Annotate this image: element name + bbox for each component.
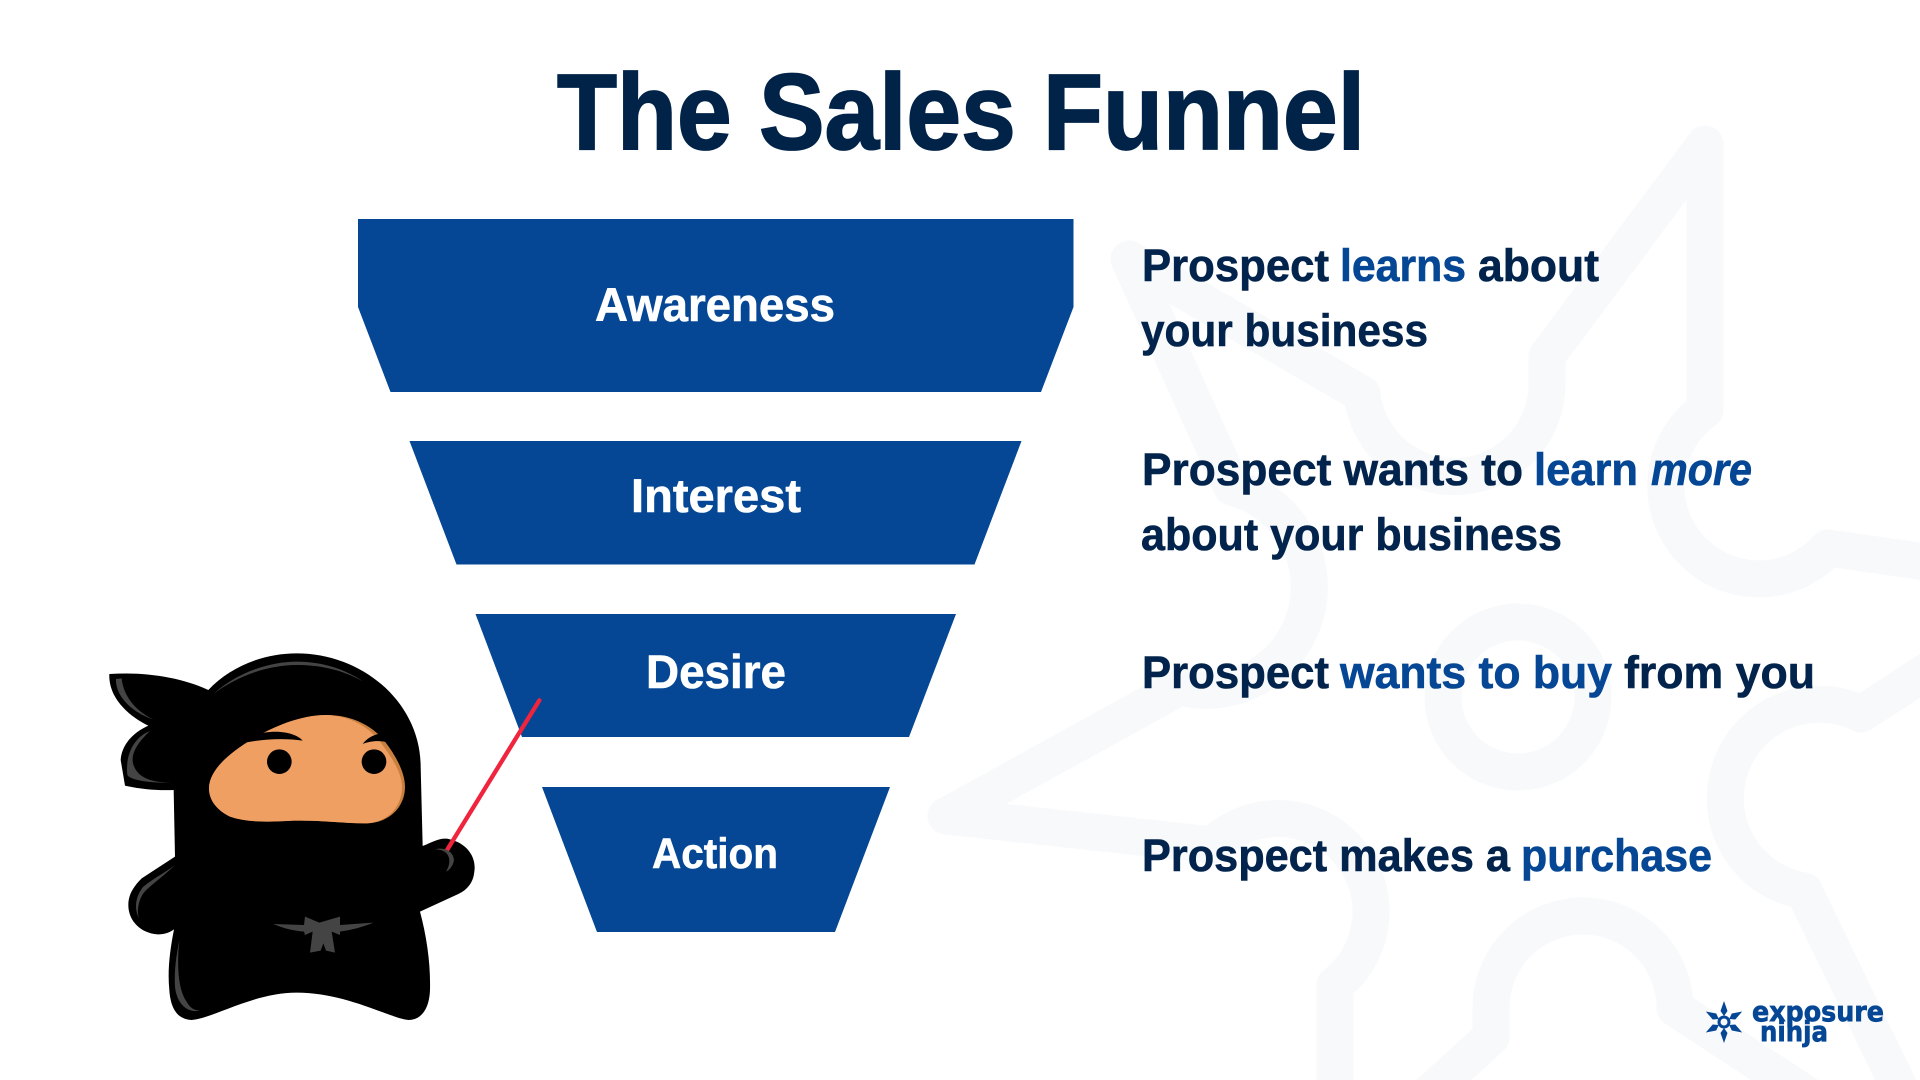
stage description: Awareness: your business [1141, 305, 1428, 356]
ninja belt [273, 917, 373, 953]
stage description: Desire: from you [1624, 647, 1815, 698]
stage description: Interest: more [1651, 444, 1752, 495]
funnel stage: Desire [476, 614, 956, 737]
background watermark: shuriken outline [946, 144, 1920, 1080]
funnel stage: Action [542, 787, 890, 932]
stage description: Desire: Prospect [1142, 647, 1329, 698]
stage description: Awareness: about [1478, 240, 1599, 291]
stage description: Interest: about your business [1141, 509, 1562, 560]
stage description: Awareness [1141, 240, 1599, 356]
logo wordmark [1752, 995, 1884, 1048]
ninja body [109, 653, 475, 1020]
stage description: Desire: wants to buy [1339, 647, 1612, 698]
ninja highlights [116, 662, 454, 1011]
funnel stage: Awareness: Awareness [595, 278, 835, 331]
stage description: Desire [1142, 647, 1815, 698]
stage description: Awareness: Prospect [1142, 240, 1329, 291]
eyes [267, 749, 292, 774]
logo wordmark: ninja [1760, 1015, 1828, 1048]
logo icon: shuriken [1704, 1001, 1744, 1043]
logo wordmark: exposure [1752, 995, 1884, 1028]
ninja mascot with pointer [109, 653, 539, 1020]
funnel stage: Interest [410, 441, 1022, 564]
stage description: Action: purchase [1521, 830, 1712, 881]
stage description: Interest [1141, 444, 1752, 560]
stage description: Action: Prospect makes a [1142, 830, 1511, 881]
logo: exposure ninja [1704, 995, 1884, 1048]
stage description: Awareness: learns [1340, 240, 1466, 291]
ninja face [209, 715, 405, 823]
stage description: Action [1142, 830, 1712, 881]
funnel stages [358, 219, 1074, 932]
pointer stick [447, 700, 539, 851]
funnel stage: Desire: Desire [646, 645, 786, 698]
funnel stage: Interest: Interest [631, 469, 801, 522]
funnel stage: Awareness [358, 219, 1074, 392]
stage description: Interest: learn [1534, 444, 1638, 495]
title: The Sales Funnel [557, 51, 1365, 172]
eyebrows [245, 732, 303, 743]
funnel stage: Action: Action [652, 830, 778, 878]
stage description: Interest: Prospect wants to [1142, 444, 1523, 495]
